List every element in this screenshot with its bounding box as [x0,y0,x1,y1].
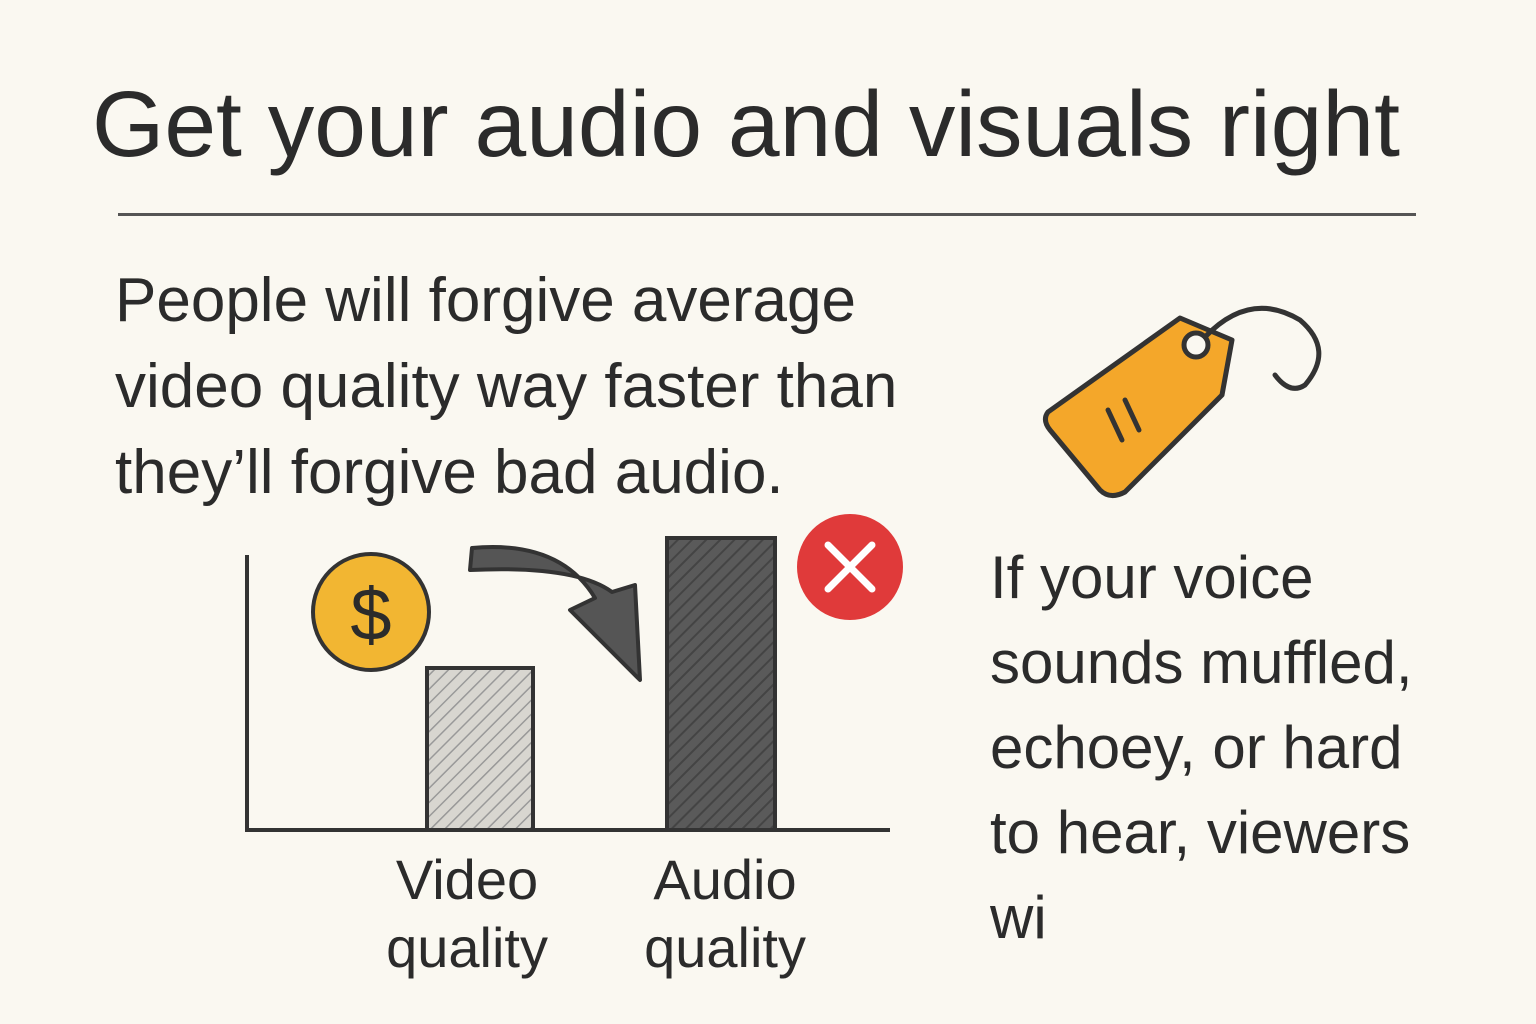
side text: wi [990,884,1047,951]
icon: coin [313,554,429,670]
icon: red x [797,514,903,620]
intro text: video quality way faster than [115,352,897,421]
side text: to hear, viewers [990,799,1410,866]
arrow [470,547,640,680]
side text: echoey, or hard [990,714,1402,781]
side text [990,544,1412,951]
intro text [115,266,897,507]
label: audio quality: Audio [653,848,797,911]
label: audio quality: quality [644,916,806,979]
label: video quality [386,848,548,979]
side text: If your voice [990,544,1313,611]
axes [247,555,890,830]
label: video quality: quality [386,916,548,979]
icon: price tag [1045,308,1319,496]
divider [118,213,1416,216]
intro text: they’ll forgive bad audio. [115,438,784,507]
icon: coin: $ [350,573,392,656]
intro text: People will forgive average [115,266,856,335]
bar: audio [667,538,775,830]
label: video quality: Video [396,848,538,911]
title: Get your audio and visuals right [92,72,1400,176]
label: audio quality [644,848,806,979]
side text: sounds muffled, [990,629,1412,696]
bar: video [427,668,533,830]
